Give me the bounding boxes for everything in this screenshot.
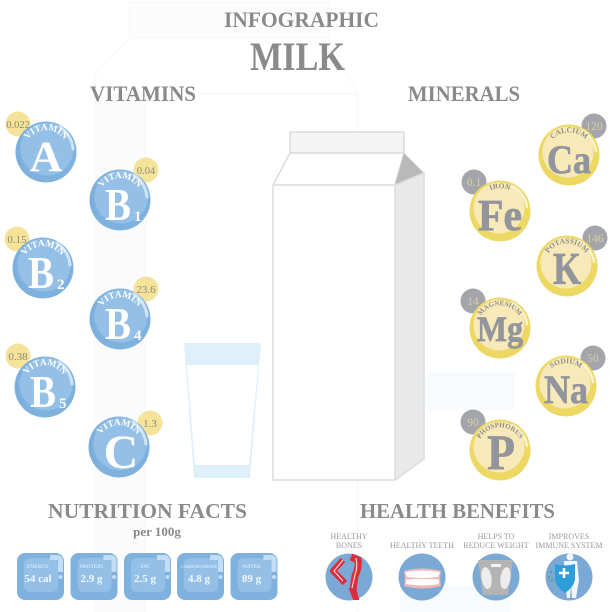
- benefit labels: HEALTHY TEETH: [390, 541, 454, 550]
- vitamin B5: VITAMIN: [22, 358, 68, 374]
- vitamin B5: 0.38: [8, 351, 28, 363]
- vitamin B1: 1: [134, 209, 142, 225]
- vitamin B4: VITAMIN: [97, 290, 143, 306]
- vitamin B4: B: [105, 298, 131, 349]
- nutrition card: energy: 54 cal: [24, 573, 52, 585]
- icon: healthy teeth: [398, 554, 446, 600]
- heading: nutrition facts: NUTRITION FACTS: [48, 499, 247, 523]
- nutrition card: carbohydrate: CARBOHYDRATE: [181, 564, 217, 569]
- mineral phosphorus: P: [487, 424, 515, 480]
- mineral magnesium: [460, 288, 530, 358]
- milk carton: [273, 132, 424, 480]
- vitamin A: 0.022: [6, 120, 30, 131]
- nutrition card: protein: 2.9 g: [80, 573, 103, 585]
- mineral iron: 0.1: [467, 177, 481, 189]
- vitamin B4: 4: [134, 328, 142, 344]
- heading: health benefits: HEALTH BENEFITS: [360, 499, 555, 523]
- vitamin B5: B: [30, 366, 56, 417]
- benefit labels: BONES: [336, 541, 362, 550]
- mineral iron: IRON: [489, 183, 511, 190]
- mineral potassium: [536, 226, 608, 296]
- vitamin A: [6, 112, 76, 182]
- icon: immune system: [546, 554, 592, 600]
- subheading: per 100g: per 100g: [133, 524, 181, 539]
- mineral sodium: [536, 346, 606, 416]
- heading: minerals: MINERALS: [408, 81, 520, 106]
- vitamin B2: 2: [57, 277, 64, 293]
- nutrition card: fat: [124, 553, 171, 600]
- mineral calcium: CALCIUM: [550, 127, 588, 139]
- vitamin B2: VITAMIN: [20, 240, 66, 255]
- benefit labels: IMPROVES: [549, 532, 589, 541]
- nutrition card: carbohydrate: [177, 553, 224, 600]
- nutrition card: water: [230, 553, 278, 600]
- vitamin B2: B: [28, 247, 54, 298]
- nutrition card: protein: PROTEIN: [80, 564, 103, 570]
- benefit labels: [330, 532, 602, 550]
- icon: weight scale: [472, 554, 520, 600]
- mineral magnesium: MAGNESIUM: [478, 300, 522, 316]
- nutrition card: fat: 2.5 g: [134, 573, 156, 585]
- vitamin A: A: [30, 134, 62, 181]
- vitamin B1: 0.04: [137, 166, 156, 177]
- nutrition card: water: WATER: [242, 564, 261, 570]
- mineral phosphorus: PHOSPHORUS: [476, 422, 524, 439]
- nutrition card: fat: FAT: [140, 564, 150, 570]
- mineral potassium: 146: [586, 233, 604, 245]
- vitamin C: 1.3: [143, 418, 157, 430]
- mineral sodium: SODIUM: [550, 358, 583, 368]
- mineral calcium: [538, 114, 606, 186]
- title: MILK: [250, 34, 345, 79]
- milk glass: [184, 343, 261, 478]
- mineral magnesium: 14: [467, 296, 479, 308]
- vitamin C: VITAMIN: [96, 418, 142, 434]
- title: [224, 7, 379, 79]
- title: INFOGRAPHIC: [224, 7, 379, 32]
- mineral phosphorus: [460, 410, 530, 480]
- mineral magnesium: Mg: [477, 309, 523, 349]
- mineral iron: Fe: [478, 191, 522, 240]
- benefit labels: IMMUNE SYSTEM: [536, 541, 602, 550]
- nutrition card: energy: ENERGY: [27, 564, 49, 570]
- heading: vitamins: VITAMINS: [90, 81, 196, 106]
- vitamin C: C: [104, 426, 138, 479]
- vitamin B4: 23.6: [136, 284, 156, 296]
- benefit labels: HEALTHY: [330, 532, 368, 541]
- benefit labels: REDUCE WEIGHT: [463, 541, 529, 550]
- vitamin B2: [4, 226, 74, 298]
- nutrition card: carbohydrate: 4.8 g: [188, 573, 210, 585]
- vitamin B2: 0.15: [7, 234, 27, 246]
- mineral potassium: K: [553, 244, 581, 294]
- vitamin B5: 5: [59, 396, 66, 412]
- background ghost glass: [400, 372, 515, 612]
- vitamin C: [88, 410, 162, 479]
- mineral iron: [462, 170, 530, 242]
- vitamin B1: [90, 158, 158, 230]
- vitamin B1: B: [105, 179, 131, 230]
- mineral potassium: POTASSIUM: [544, 238, 590, 254]
- nutrition card: water: 89 g: [242, 573, 262, 585]
- nutrition card: energy: [17, 553, 64, 600]
- vitamin B5: [6, 344, 76, 418]
- benefit labels: HELPS TO: [478, 532, 515, 541]
- mineral sodium: Na: [544, 367, 588, 412]
- background ghost carton: [95, 2, 358, 612]
- mineral calcium: 120: [585, 121, 603, 133]
- mineral sodium: 50: [587, 353, 599, 365]
- vitamin A: VITAMIN: [23, 124, 69, 139]
- vitamin B1: VITAMIN: [97, 172, 143, 187]
- vitamin B4: [90, 276, 158, 350]
- mineral calcium: Ca: [547, 137, 591, 182]
- icon: healthy bones: [326, 554, 372, 600]
- nutrition card: protein: [70, 553, 118, 600]
- mineral phosphorus: 90: [467, 417, 479, 429]
